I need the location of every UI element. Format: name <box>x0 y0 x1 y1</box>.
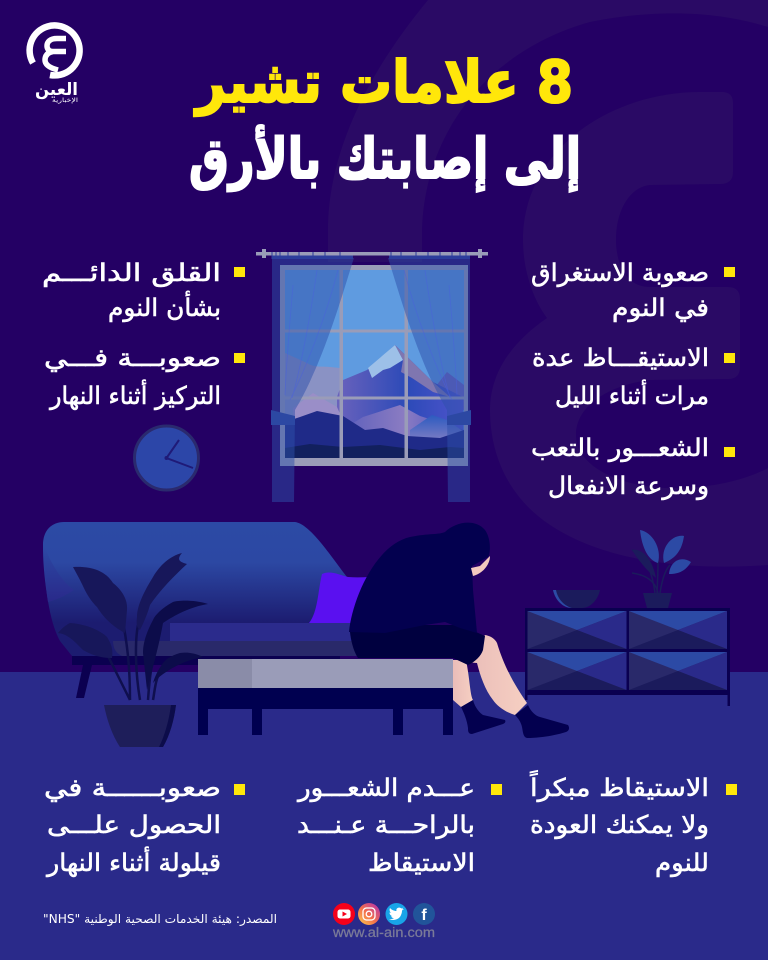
front leg <box>464 635 527 715</box>
window view: sky and mountains <box>285 270 464 458</box>
plant stems <box>100 600 165 700</box>
logo: العين <box>35 80 78 100</box>
source note: المصدر: هيئة الخدمات الصحية الوطنية "NHS" <box>43 912 277 927</box>
sofa armrest <box>44 545 74 602</box>
bullet: waking early <box>529 770 737 877</box>
website: www.al-ain.com <box>332 925 435 940</box>
bullet: waking several times: مرات أثناء الليل <box>555 380 709 410</box>
bullet: nap: صعوبــــــة في <box>44 773 221 802</box>
bullet: fatigue and irritability: وسرعة الانفعال <box>548 471 709 500</box>
bullet: constant worry: القلق الدائـــم <box>42 258 221 287</box>
icon: facebook: f <box>421 907 427 924</box>
icon: facebook <box>413 903 435 925</box>
bullet: waking early: للنوم <box>655 848 709 877</box>
bullet: difficulty falling asleep: صعوبة الاستغراق <box>531 258 709 287</box>
sofa seat front <box>113 641 360 656</box>
floor <box>0 672 768 960</box>
window bars <box>285 270 464 458</box>
title line 2: إلى إصابتك بالأرق <box>189 124 581 192</box>
icon: twitter <box>386 903 408 925</box>
bullet: difficulty falling asleep: في النوم <box>612 293 709 322</box>
bullet: difficulty falling asleep <box>531 258 735 322</box>
window frame <box>280 265 468 466</box>
drawer bottom left <box>528 652 626 690</box>
title line 1: 8 علامات تشير <box>193 48 573 117</box>
bullet: concentration <box>44 343 245 410</box>
bullet: nap <box>44 773 245 877</box>
bullet: not rested: الاستيقاظ <box>368 848 475 877</box>
bullet: constant worry: بشأن النوم <box>108 291 221 322</box>
icon: youtube <box>333 903 355 925</box>
logo: الإخبارية <box>52 97 78 104</box>
potted plant <box>58 553 208 747</box>
shorts <box>350 625 485 665</box>
bowl <box>553 590 600 608</box>
bullet: fatigue and irritability: الشعـــور بالتعب <box>531 433 709 462</box>
bullet: fatigue and irritability <box>531 433 735 500</box>
plant pot <box>104 705 176 747</box>
bullet: waking several times: الاستيقـــاظ عدة <box>532 343 709 372</box>
sofa back <box>43 522 372 656</box>
logo <box>30 25 80 104</box>
bullet: not rested <box>296 773 502 877</box>
icon: instagram <box>358 903 380 925</box>
bullet: not rested: بالراحـــة عـنـــد <box>297 810 475 839</box>
hoodie <box>349 523 490 633</box>
left curtain <box>271 258 354 502</box>
bullet: waking early: الاستيقاظ مبكراً <box>529 770 709 802</box>
bullet: concentration: صعوبـــة فـــي <box>44 343 221 372</box>
ottoman bench <box>198 659 453 735</box>
bullet: concentration: التركيز أثناء النهار <box>48 380 221 410</box>
drawer top left <box>528 611 626 649</box>
bullet: nap: الحصول علـــى <box>47 810 221 839</box>
bullet: constant worry <box>42 258 245 322</box>
pillow <box>309 572 385 623</box>
face <box>471 556 490 576</box>
drawer bottom right <box>629 652 727 690</box>
sofa base and legs <box>72 656 340 698</box>
curtain rod <box>256 249 488 259</box>
drawer top right <box>629 611 727 649</box>
bullet: not rested: عـــدم الشعـــور <box>296 773 475 802</box>
socks <box>461 700 505 734</box>
watermark logo <box>328 0 768 567</box>
bullet: waking early: ولا يمكنك العودة <box>530 810 709 839</box>
bullet: waking several times <box>532 343 735 410</box>
sofa cushion <box>170 623 360 641</box>
bullet: nap: قيلولة أثناء النهار <box>45 847 221 877</box>
back leg <box>452 660 473 707</box>
window with curtains <box>256 249 488 502</box>
sofa <box>43 522 385 698</box>
plant leaves <box>73 567 127 633</box>
person <box>349 523 569 738</box>
dresser <box>525 608 730 706</box>
wall clock <box>134 426 198 490</box>
right curtain <box>388 258 471 502</box>
small plant <box>632 530 691 608</box>
